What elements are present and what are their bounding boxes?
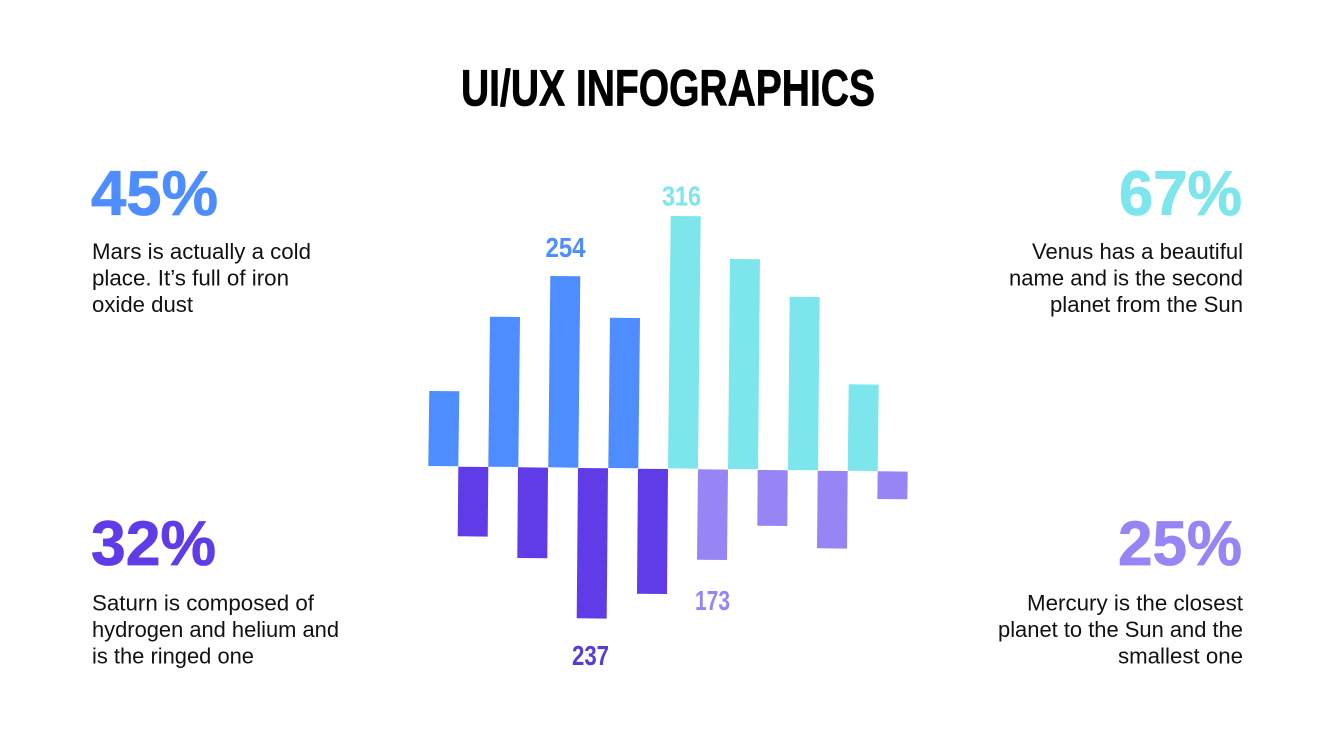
text block: Mars: oxide dust (92, 292, 193, 317)
value label: 173: 173 (695, 585, 730, 616)
text block: Mars: place. It’s full of iron (92, 266, 289, 290)
text block: Saturn: hydrogen and helium and (92, 617, 339, 642)
panel: Mars 45% (91, 159, 311, 317)
text block: Mars (92, 239, 311, 317)
bar chart (428, 180, 908, 671)
stat: 25%: 25% (1118, 509, 1242, 579)
text block: Mars: Mars is actually a cold (92, 239, 311, 264)
value label: 254: 254 (546, 232, 586, 263)
text block: Venus: Venus has a beautiful (1032, 239, 1243, 264)
bars: lavender series (697, 469, 908, 560)
panel: Venus 67% (1009, 159, 1243, 317)
stat: 32%: 32% (91, 509, 216, 579)
text block: Venus: name and is the second (1009, 266, 1243, 290)
value label: 237: 237 (572, 640, 609, 671)
value label: 316: 316 (662, 180, 701, 212)
title: UI/UX INFOGRAPHICS (461, 60, 875, 116)
text block: Saturn: is the ringed one (92, 644, 254, 668)
bars: purple series (458, 467, 668, 619)
text block: Mercury: Mercury is the closest (1027, 590, 1243, 616)
text block: Saturn: Saturn is composed of (92, 590, 315, 616)
panel: Mercury 25% (998, 509, 1243, 668)
text block: Venus: planet from the Sun (1050, 292, 1243, 317)
text block: Mercury: smallest one (1118, 644, 1243, 668)
text block: Mercury: planet to the Sun and the (998, 617, 1243, 642)
stat: 45%: 45% (91, 159, 218, 229)
text block: Mercury (998, 590, 1243, 668)
bars: blue series (428, 276, 640, 468)
text block: Venus (1009, 239, 1243, 317)
text block: Saturn (92, 590, 339, 668)
panel: Saturn 32% (91, 509, 339, 668)
stat: 67%: 67% (1119, 159, 1242, 229)
bars: teal series (668, 216, 879, 471)
